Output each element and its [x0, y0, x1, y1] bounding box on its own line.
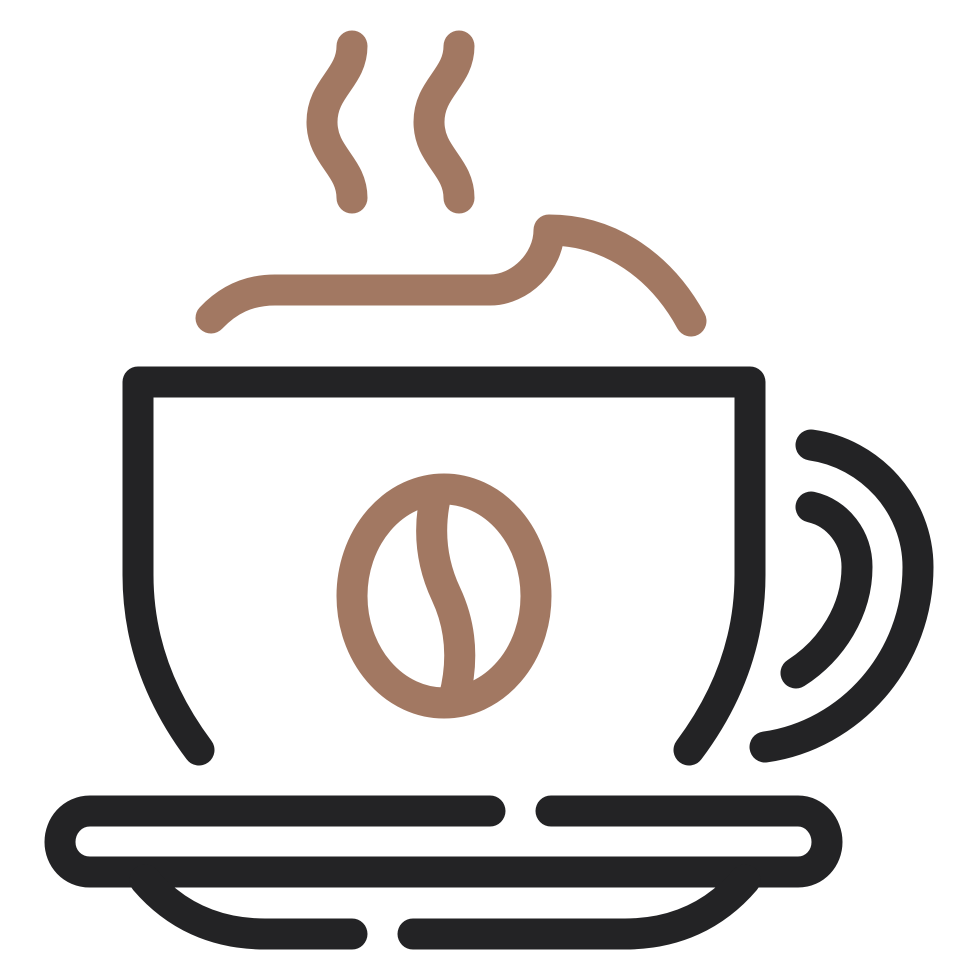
icon: coffee bean [352, 489, 536, 703]
saucer base [145, 880, 745, 934]
cup body [138, 382, 750, 750]
icon: steam left [322, 46, 352, 198]
saucer [60, 811, 827, 872]
icon: steam right [429, 46, 459, 198]
cup handle inner [796, 507, 857, 673]
icon: coffee foam [211, 230, 691, 321]
cup handle outer [765, 445, 918, 747]
